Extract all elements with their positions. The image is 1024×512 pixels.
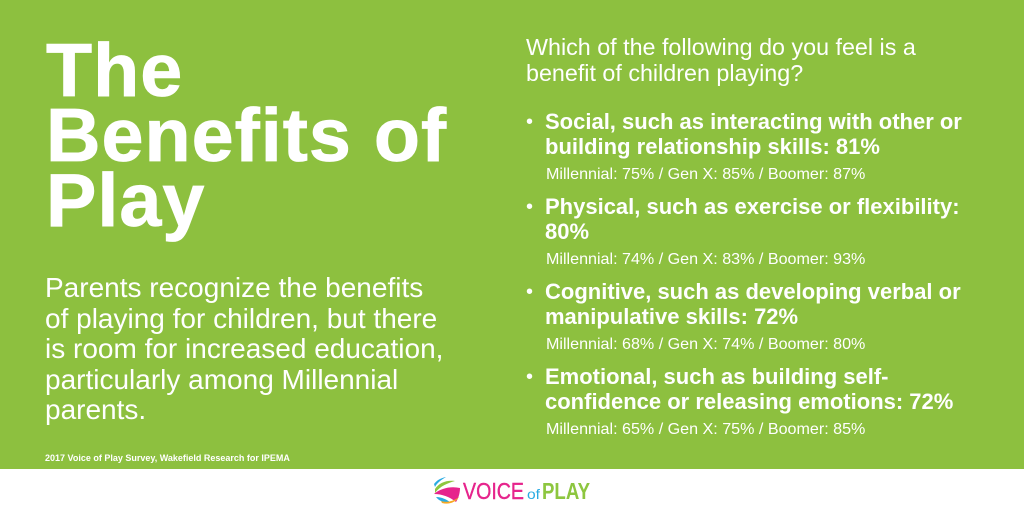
benefit: physical: Millennial: 74% / Gen X: 83% / Boomer: 93% bbox=[546, 250, 865, 268]
logo wordmark: of bbox=[527, 486, 540, 502]
title: The bbox=[46, 28, 183, 112]
benefit: cognitive: Cognitive, such as developing verbal or bbox=[545, 278, 961, 304]
benefit: social: building relationship skills: 81% bbox=[545, 134, 880, 158]
logo wordmark bbox=[463, 478, 590, 504]
survey question bbox=[526, 34, 916, 86]
benefit: emotional: confidence or releasing emotions: 72% bbox=[545, 388, 953, 414]
benefit: emotional: Emotional, such as building self- bbox=[545, 364, 888, 388]
benefit: social: Millennial: 75% / Gen X: 85% / Boomer: 87% bbox=[546, 165, 865, 183]
source note: 2017 Voice of Play Survey, Wakefield Research for IPEMA bbox=[45, 453, 290, 463]
intro paragraph: of playing for children, but there bbox=[45, 302, 437, 334]
survey question: Which of the following do you feel is a bbox=[526, 34, 916, 60]
benefit: physical: 80% bbox=[545, 218, 589, 244]
benefit: social: Social, such as interacting with other or bbox=[545, 108, 962, 134]
icon: swirl bbox=[434, 477, 460, 504]
benefit: cognitive: Millennial: 68% / Gen X: 74% / Boomer: 80% bbox=[546, 335, 865, 353]
benefit: physical: Physical, such as exercise or flexibility: bbox=[545, 194, 960, 218]
benefit: emotional: • bbox=[526, 366, 533, 388]
survey question: benefit of children playing? bbox=[526, 60, 803, 86]
benefit: cognitive: • bbox=[526, 281, 533, 303]
intro paragraph: Parents recognize the benefits bbox=[45, 272, 423, 303]
title: Play bbox=[46, 158, 205, 242]
logo wordmark: VOICE bbox=[463, 478, 524, 504]
benefit: physical: • bbox=[526, 196, 533, 218]
intro paragraph: particularly among Millennial bbox=[45, 364, 398, 394]
logo: Voice of Play bbox=[434, 477, 590, 504]
benefit: physical bbox=[526, 194, 960, 268]
benefit: cognitive: manipulative skills: 72% bbox=[545, 304, 798, 328]
title bbox=[46, 28, 447, 242]
intro paragraph bbox=[45, 272, 443, 425]
benefit: social: • bbox=[526, 111, 533, 133]
benefit: cognitive bbox=[526, 278, 961, 353]
benefit: emotional bbox=[526, 364, 953, 438]
benefit: emotional: Millennial: 65% / Gen X: 75% / Boomer: 85% bbox=[546, 420, 865, 438]
intro paragraph: is room for increased education, bbox=[45, 333, 443, 364]
benefit: social bbox=[526, 108, 962, 183]
intro paragraph: parents. bbox=[45, 394, 146, 425]
title: Benefits of bbox=[46, 93, 447, 177]
